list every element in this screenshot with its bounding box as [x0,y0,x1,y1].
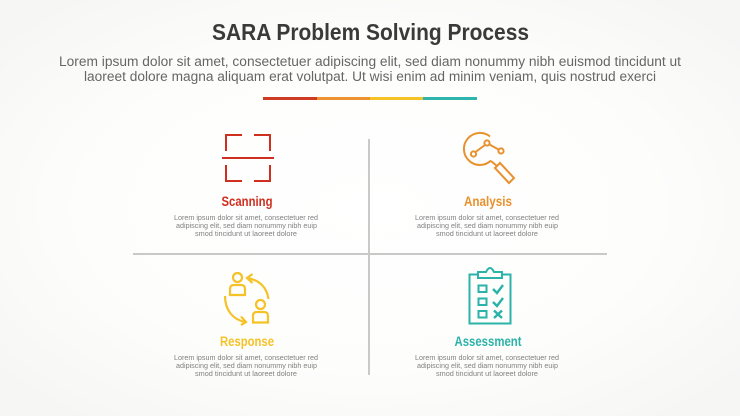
icon: two people with cycle arrows [225,273,268,325]
text: assessment description [415,355,559,378]
title: SARA Problem Solving Process [212,19,529,45]
text: scanning description: adipiscing elit, sed diam nonummy nibh euip [176,223,317,230]
heading: scanning: Scanning [222,194,272,209]
heading: assessment: Assessment [454,334,522,349]
text: assessment description: Lorem ipsum dolor sit amet, consectetuer red [415,355,559,362]
panel: response [174,273,318,378]
text: assessment description: adipiscing elit, sed diam nonummy nibh euip [417,363,558,370]
intro paragraph: laoreet dolore magna aliquam erat volutpat. Ut wisi enim ad minim veniam, quis nostrud exerci [84,69,656,84]
heading: response: Response [220,334,274,349]
text: analysis description: smod tincidunt ut laoreet dolore [436,231,538,238]
text: response description: Lorem ipsum dolor sit amet, consectetuer red [174,355,318,362]
text: analysis description [415,215,559,238]
panel: analysis [415,133,559,238]
text: scanning description [174,215,318,238]
intro paragraph [59,54,681,84]
text: response description [174,355,318,378]
text: response description: adipiscing elit, sed diam nonummy nibh euip [176,363,317,370]
intro paragraph: Lorem ipsum dolor sit amet, consectetuer adipiscing elit, sed diam nonummy nibh euismod tincidunt ut [59,54,681,69]
text: response description: smod tincidunt ut laoreet dolore [195,371,297,378]
icon: scanning frame [222,135,274,181]
panel: scanning [174,135,318,238]
text: scanning description: smod tincidunt ut laoreet dolore [195,231,297,238]
text: analysis description: Lorem ipsum dolor sit amet, consectetuer red [415,215,559,222]
panel: assessment [415,268,559,378]
quadrant cross lines [133,139,607,375]
heading: analysis: Analysis [464,194,512,209]
text: scanning description: Lorem ipsum dolor sit amet, consectetuer red [174,215,318,222]
text: assessment description: smod tincidunt ut laoreet dolore [436,371,538,378]
four-colour divider bar [263,97,477,100]
text: analysis description: adipiscing elit, sed diam nonummy nibh euip [417,223,558,230]
icon: clipboard checklist [470,268,510,324]
icon: magnifier with nodes [464,133,514,183]
